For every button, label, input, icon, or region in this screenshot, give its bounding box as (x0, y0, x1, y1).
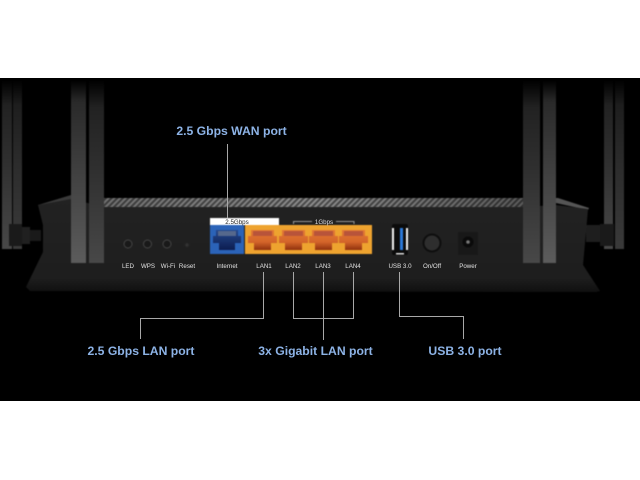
left button labels (122, 263, 195, 270)
left front antennas (71, 80, 104, 263)
2.5Gbps white tag (210, 218, 279, 225)
router body (26, 195, 600, 292)
router artwork (2, 80, 624, 292)
LAN2 jack (279, 230, 308, 250)
callout line: 2.5G LAN (140, 272, 264, 339)
LAN4 jack (339, 230, 368, 250)
1Gbps text: 1Gbps (315, 219, 333, 226)
port labels: LAN4 (345, 263, 361, 270)
far left antenna (2, 80, 22, 249)
orange LAN ports panel (245, 225, 372, 254)
heading: WAN port: 2.5 Gbps WAN port (176, 124, 287, 138)
LAN1 jack (248, 230, 277, 250)
port labels: LAN1 (256, 263, 272, 270)
blue WAN port (210, 225, 244, 254)
left button labels: Reset (179, 263, 195, 270)
callout line: USB (400, 272, 464, 339)
right antenna hinge (586, 224, 614, 246)
port labels: On/Off (423, 263, 441, 270)
2.5Gbps tag text: 2.5Gbps (225, 219, 249, 226)
vent grille (104, 198, 523, 207)
port labels: Internet (217, 263, 238, 270)
port labels: LAN2 (285, 263, 301, 270)
heading: 2.5G LAN port: 2.5 Gbps LAN port (88, 344, 194, 358)
heading: gigabit LAN port: 3x Gigabit LAN port (258, 344, 373, 358)
on/off switch (422, 234, 442, 252)
left wing top edge (38, 195, 71, 207)
port labels: LAN3 (315, 263, 331, 270)
right front antennas (523, 80, 556, 263)
heading: USB port: USB 3.0 port (428, 344, 502, 358)
left button labels: LED (122, 263, 135, 270)
left antenna hinge (9, 224, 41, 246)
black background panel (0, 78, 640, 401)
left button labels: WPS (141, 263, 155, 270)
LAN3 jack (309, 230, 338, 250)
power socket (458, 232, 478, 255)
callout line: WAN (226, 144, 228, 218)
USB 3.0 port (392, 224, 408, 255)
right wing top edge (556, 198, 589, 210)
port labels: Power (459, 263, 477, 270)
port labels: USB 3.0 (388, 263, 412, 270)
router chassis (26, 199, 600, 292)
callout line: gigabit LAN (294, 272, 354, 340)
left status buttons (124, 240, 189, 248)
far right antenna (604, 80, 624, 249)
port labels (217, 263, 477, 270)
1Gbps bracket (294, 222, 354, 224)
left button labels: Wi-Fi (161, 263, 175, 270)
